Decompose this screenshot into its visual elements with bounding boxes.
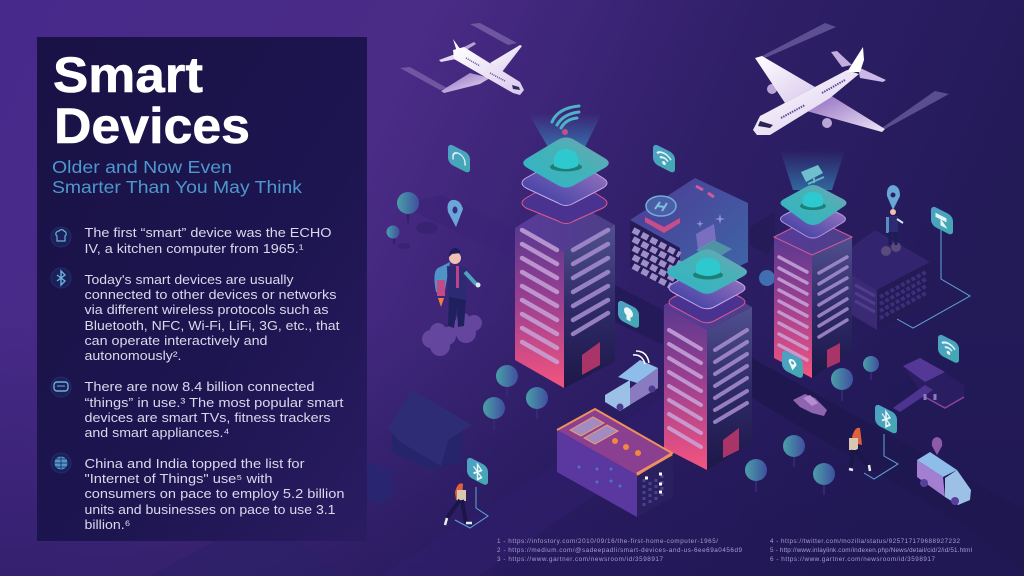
text: wireless protocols: Bluetooth, NFC, Wi-Fi, LiFi, 3G, etc., that [84, 318, 340, 333]
footnotes: sources right: 6 - https://www.gartner.com/newsroom/id/3598917 [770, 556, 935, 563]
icon: location tile [782, 349, 803, 380]
icon: bluetooth [51, 268, 71, 288]
subtitle: Older and Now Even [52, 157, 232, 177]
icon: wifi tile right [938, 333, 959, 365]
text: connected things: and smart appliances.⁴ [84, 425, 230, 440]
house silhouettes [150, 390, 472, 576]
shelter building [893, 358, 964, 412]
text: wireless protocols [84, 272, 340, 363]
footnotes: sources left: 2 - https://medium.com/@sadeepadli/smart-devices-and-us-6ee69a0456d9 [497, 547, 742, 554]
layer stack [522, 113, 609, 224]
text: China and India: consumers on pace to employ 5.2 billion [84, 486, 344, 501]
text: wireless protocols: Today's smart devices are usually [84, 272, 294, 287]
icon: camera tile [931, 205, 953, 236]
car [793, 394, 827, 416]
figure: rooftop man [881, 209, 903, 256]
text: connected things: devices are smart TVs, fitness trackers [84, 410, 331, 425]
icon: security camera [801, 165, 824, 184]
plane: left [400, 23, 524, 95]
title: Devices [54, 98, 250, 154]
plane: right [753, 23, 949, 135]
figure: runner left [445, 483, 472, 525]
connector lines [455, 230, 970, 528]
text: connected things: “things” in use.³ The most popular smart [84, 395, 344, 410]
footnotes: sources left [497, 538, 742, 563]
icon: chef hat [51, 227, 71, 247]
truck with wifi [605, 351, 658, 411]
helipad building [630, 178, 748, 295]
icon: bluetooth tile left [467, 456, 488, 487]
tower: left [515, 106, 615, 388]
building: low rooftop block [557, 409, 673, 517]
panel: text [37, 37, 367, 541]
tower: right [774, 150, 852, 378]
icon: map pin left [448, 200, 463, 227]
text: China and India: billion.⁶ [84, 517, 130, 532]
icon: wifi tile [653, 143, 675, 174]
text: China and India: units and businesses on pace to use 3.1 [84, 502, 336, 517]
text: first smart device: The first “smart” device was the ECHO [84, 225, 332, 240]
figure: jetpack man [422, 248, 482, 356]
truck with pin [917, 437, 971, 505]
subtitle [52, 157, 302, 197]
subtitle: Smarter Than You May Think [52, 177, 302, 197]
icon: light bulb tile [618, 299, 639, 330]
layer stack [667, 249, 747, 323]
text: China and India: "Internet of Things" use⁵ with [84, 471, 272, 486]
right small tree [759, 270, 775, 296]
text: first smart device: IV, a kitchen computer from 1965.¹ [84, 241, 304, 256]
layer stack [780, 150, 846, 238]
trees [386, 192, 879, 495]
footnotes: sources right [770, 538, 972, 563]
dark building with rooftop figure [852, 230, 930, 330]
text: first smart device [84, 225, 332, 256]
text: wireless protocols: connected to other devices or networks [84, 287, 337, 302]
dark block behind right tower [750, 212, 775, 255]
title [53, 47, 250, 154]
footnotes: sources left: 3 - https://www.gartner.com/newsroom/id/3598917 [497, 556, 663, 563]
text: wireless protocols: can operate interactively and [84, 333, 268, 348]
footnotes: sources right: 5 - http://www.inlaylink.com/indexen.php/News/detail/cid/2/id/51.html [770, 547, 972, 554]
text: connected things: There are now 8.4 billion connected [84, 379, 314, 394]
icon: wifi beam [552, 106, 579, 135]
footnotes: sources left: 1 - https://infostory.com/2010/09/16/the-first-home-computer-1965/ [497, 538, 718, 545]
icon: smart tv [51, 377, 71, 397]
text: wireless protocols: autonomously². [84, 348, 182, 363]
icon: map pin right [887, 185, 900, 210]
icon: headset tile [448, 143, 470, 174]
helipad [645, 196, 680, 233]
figure: runner right [849, 428, 870, 471]
footnotes: sources right: 4 - https://twitter.com/mozilla/status/925717179688927232 [770, 538, 960, 545]
tower: middle [664, 249, 752, 470]
text: China and India: China and India topped the list for [84, 456, 305, 471]
icon: globe [51, 453, 71, 473]
icon: bluetooth tile right [875, 403, 897, 435]
text: wireless protocols: via different wireless protocols such as [84, 302, 329, 317]
text: China and India [84, 456, 344, 532]
icon: laptop [696, 224, 732, 260]
title: Smart [53, 47, 203, 103]
text: connected things [84, 379, 344, 440]
